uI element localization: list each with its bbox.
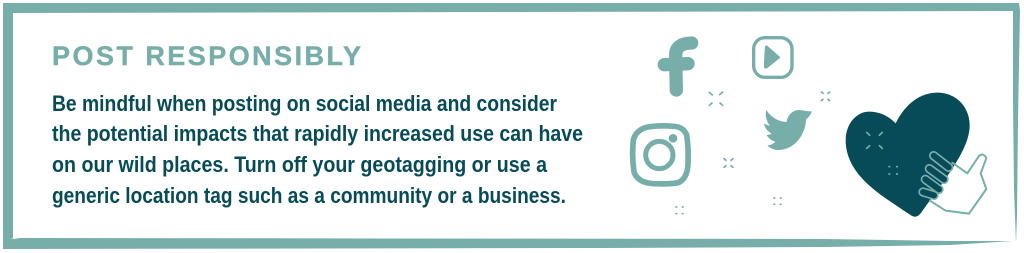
body text: on our wild places. Turn off your geotagging or use a <box>52 152 548 177</box>
sparkles and dots <box>676 92 830 214</box>
heart sparkles <box>867 132 897 174</box>
heading: POST RESPONSIBLY <box>52 41 361 71</box>
body text: Be mindful when posting on social media and consider <box>52 91 557 116</box>
body text <box>52 91 583 208</box>
icon: facebook <box>664 43 692 90</box>
icon: instagram <box>633 126 688 184</box>
heart <box>846 93 970 217</box>
body text: the potential impacts that rapidly increased use can have <box>52 121 583 146</box>
fingers <box>923 156 949 195</box>
icon: twitter bird <box>764 110 812 150</box>
social icons group <box>633 38 830 214</box>
icon: heart with thumbs-up hand <box>846 93 986 217</box>
icon: video play <box>754 38 792 77</box>
hand outline <box>930 154 986 214</box>
body text: generic location tag such as a community or a business. <box>52 183 566 208</box>
